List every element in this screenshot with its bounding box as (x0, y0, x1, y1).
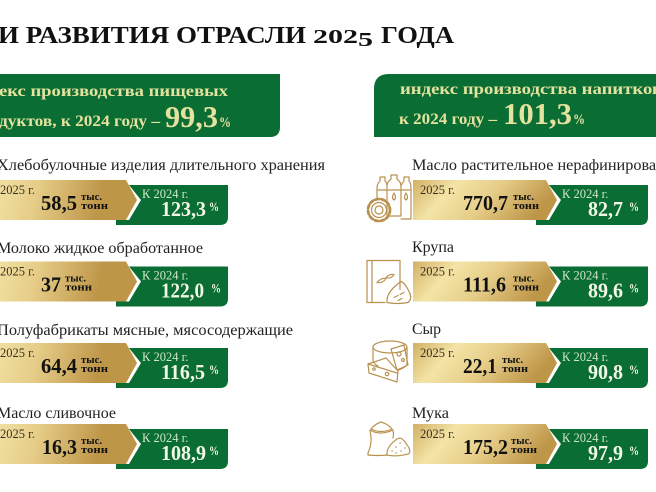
row: unrefined vegetable oil: К 2024 г. (562, 187, 608, 201)
icon: groats box and sack (367, 260, 411, 304)
title (0, 22, 454, 51)
panel: beverage production index: индекс производства напитков (400, 81, 656, 98)
row: semi-finished meat products: тыс. (81, 355, 102, 366)
row: bakery products: тонн (81, 201, 108, 212)
row: butter: К 2024 г. (142, 431, 188, 445)
row: flour: 2025 г. (420, 427, 455, 441)
row: semi-finished meat products: % (209, 363, 219, 377)
row: cheese: % (629, 363, 639, 377)
row: unrefined vegetable oil: 770,7 (463, 191, 508, 215)
row: groats: 111,6 (463, 272, 506, 296)
row: butter: тыс. (81, 436, 102, 447)
row: groats (367, 239, 648, 306)
row: cheese: 2025 г. (420, 346, 455, 360)
panel: food production index (0, 74, 280, 137)
row: processed milk: тыс. (65, 274, 86, 284)
row: bakery products: 58,5 (41, 191, 77, 215)
row: processed milk: % (211, 282, 221, 296)
row: semi-finished meat products: 2025 г. (0, 346, 35, 360)
row: butter: % (209, 444, 219, 458)
row: flour: 175,2 (463, 435, 508, 459)
row: processed milk (0, 240, 228, 306)
row: butter: 108,9 (161, 441, 206, 465)
row: semi-finished meat products: К 2024 г. (142, 350, 188, 364)
row: groats: Крупа (412, 239, 454, 256)
panel: food production index: % (219, 115, 231, 131)
row: flour: тыс. (511, 436, 532, 447)
row: semi-finished meat products: 116,5 (161, 360, 205, 384)
row: processed milk: тонн (65, 282, 92, 294)
row: butter: Масло сливочное (0, 405, 116, 422)
panel: beverage production index: 101,3 (503, 96, 572, 131)
panel: food production index: дуктов, к 2024 году – (0, 113, 160, 130)
row: cheese: 22,1 (463, 354, 497, 378)
row: processed milk: Молоко жидкое обработанное (0, 240, 203, 257)
row: unrefined vegetable oil: тонн (513, 201, 539, 212)
row: flour: тонн (511, 445, 537, 456)
row: butter (0, 405, 228, 469)
row: butter: 16,3 (42, 435, 77, 459)
row: flour: % (629, 444, 639, 458)
row: bakery products: Хлебобулочные изделия длительного хранения (0, 157, 325, 174)
row: bakery products: 123,3 (161, 197, 206, 221)
row: cheese: К 2024 г. (562, 350, 608, 364)
row: groats: % (629, 282, 639, 296)
row: cheese: 90,8 (588, 360, 623, 384)
row: cheese: тонн (502, 364, 528, 375)
panel: food production index: екс производства пищевых (0, 83, 228, 100)
title: 5 (358, 29, 373, 51)
row: semi-finished meat products (0, 322, 293, 388)
row: bakery products: 2025 г. (0, 183, 35, 197)
row: bakery products: тыс. (81, 192, 102, 203)
row: semi-finished meat products: тонн (81, 364, 108, 375)
row: bakery products (0, 157, 325, 225)
title: И РАЗВИТИЯ ОТРАСЛИ (0, 22, 306, 49)
icon: cheese (368, 341, 408, 382)
row: flour: К 2024 г. (562, 431, 608, 445)
row: unrefined vegetable oil: 2025 г. (420, 183, 455, 197)
title: ГОДА (381, 22, 454, 49)
row: unrefined vegetable oil: % (629, 200, 639, 214)
row: semi-finished meat products: 64,4 (41, 354, 77, 378)
panel: beverage production index: к 2024 году – (399, 111, 497, 128)
row: processed milk: 37 (41, 272, 61, 296)
panel: beverage production index (374, 74, 656, 137)
icon: bottles and sunflower (368, 175, 411, 221)
row: flour: 97,9 (588, 441, 623, 465)
title: 202 (313, 26, 343, 48)
row: processed milk: 2025 г. (0, 264, 35, 278)
row: butter: тонн (81, 445, 108, 456)
row: cheese: тыс. (502, 355, 523, 366)
panel: food production index: 99,3 (165, 99, 218, 134)
row: processed milk: К 2024 г. (142, 268, 188, 282)
row: processed milk: 122,0 (161, 278, 204, 302)
row: unrefined vegetable oil: тыс. (513, 192, 534, 203)
row: cheese: Сыр (412, 321, 441, 338)
row: butter: 2025 г. (0, 427, 35, 441)
row: unrefined vegetable oil (368, 157, 656, 225)
row: semi-finished meat products: Полуфабрикаты мясные, мясосодержащие (0, 322, 293, 339)
row: bakery products: % (209, 200, 219, 214)
row: groats: тыс. (513, 274, 534, 284)
row: groats: 2025 г. (420, 264, 455, 278)
row: groats: 89,6 (588, 278, 623, 302)
row: flour (368, 405, 648, 469)
row: groats: К 2024 г. (562, 268, 608, 282)
row: unrefined vegetable oil: 82,7 (588, 197, 623, 221)
row: bakery products: К 2024 г. (142, 187, 188, 201)
icon: flour sack (368, 422, 410, 456)
row: cheese (368, 321, 648, 388)
panel: beverage production index: % (573, 112, 585, 128)
row: flour: Мука (412, 405, 449, 422)
row: groats: тонн (513, 282, 539, 294)
